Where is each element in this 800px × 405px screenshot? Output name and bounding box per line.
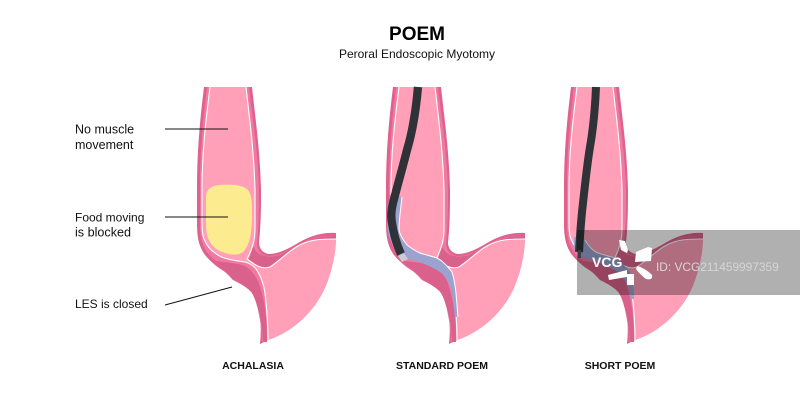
lumen white line bbox=[585, 240, 615, 258]
endoscope tip bbox=[578, 250, 581, 258]
panel: standard POEM diagram bbox=[386, 87, 525, 344]
label: no muscle movement: movement bbox=[75, 138, 134, 152]
subtitle: Peroral Endoscopic Myotomy bbox=[339, 47, 495, 61]
submucosal tunnel bbox=[574, 237, 634, 299]
caption: achalasia: ACHALASIA bbox=[222, 360, 284, 372]
label: food moving is blocked: Food moving bbox=[75, 210, 144, 224]
watermark star bbox=[608, 240, 652, 285]
endoscope bbox=[579, 87, 596, 252]
pointer lines bbox=[165, 129, 232, 305]
watermark bbox=[577, 230, 800, 295]
label: food moving is blocked: is blocked bbox=[75, 226, 131, 240]
endoscope bbox=[391, 87, 418, 254]
lumen white line bbox=[399, 197, 458, 317]
watermark ID: ID: VCG211459997359 bbox=[656, 260, 779, 274]
endoscope tip bbox=[398, 253, 408, 262]
caption: short POEM: SHORT POEM bbox=[585, 360, 656, 372]
label: LES is closed: LES is closed bbox=[75, 297, 148, 311]
submucosal tunnel bbox=[387, 195, 458, 317]
caption: standard POEM: STANDARD POEM bbox=[396, 360, 488, 372]
panel: short POEM diagram bbox=[564, 87, 703, 344]
title: POEM bbox=[389, 24, 445, 45]
label: no muscle movement: No muscle bbox=[75, 122, 134, 136]
food bolus bbox=[206, 185, 252, 255]
watermark VCG: VCG bbox=[592, 254, 622, 270]
panel: achalasia diagram bbox=[165, 87, 336, 344]
